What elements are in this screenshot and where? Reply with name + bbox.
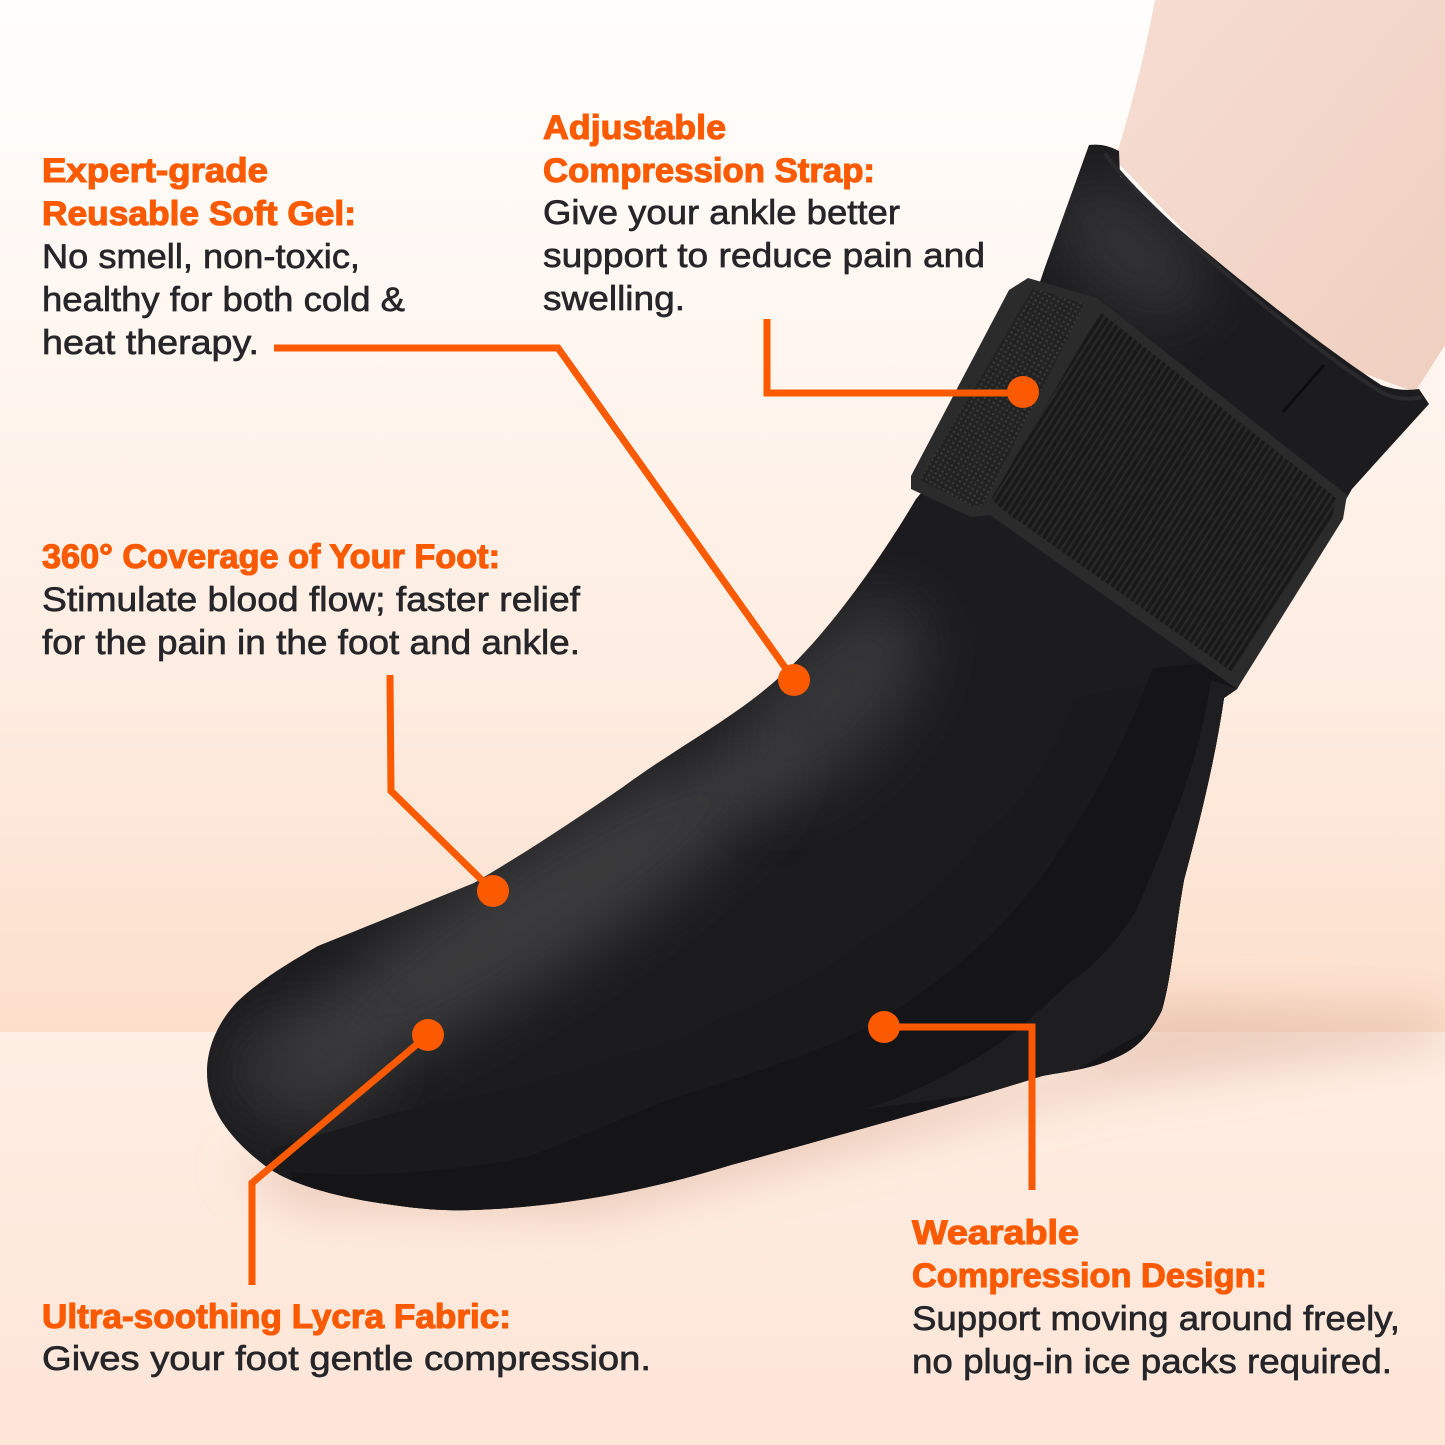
dot — [477, 875, 509, 907]
dot — [412, 1019, 444, 1051]
sole band — [278, 688, 1238, 1210]
text: Expert-grade Reusable Soft Gel: Expert-grade — [42, 152, 268, 190]
text: 360 Coverage: for the pain in the foot and ankle. — [42, 624, 580, 662]
sock body — [207, 145, 1429, 1210]
text: Expert-grade Reusable Soft Gel: healthy for both cold & — [42, 281, 405, 319]
text: Adjustable Compression Strap: swelling. — [543, 280, 685, 318]
heel panel — [866, 680, 1240, 1109]
text: Wearable Compression Design: Compression Design: — [912, 1257, 1267, 1295]
text: 360 Coverage — [42, 538, 581, 662]
text: Adjustable Compression Strap — [543, 109, 985, 318]
text: 360 Coverage: 360° Coverage of Your Foot: — [42, 538, 500, 576]
velcro strap — [911, 278, 1347, 689]
text: Expert-grade Reusable Soft Gel: Reusable Soft Gel: — [42, 195, 356, 233]
text: Expert-grade Reusable Soft Gel: heat therapy. — [42, 324, 259, 362]
text: Ultra-soothing Lycra Fabric: Ultra-soothing Lycra Fabric: — [42, 1298, 511, 1336]
dot — [1007, 376, 1039, 408]
text: Adjustable Compression Strap: Give your ankle better — [543, 194, 900, 232]
text: 360 Coverage: Stimulate blood flow; faster relief — [42, 581, 581, 619]
shading and panels — [220, 154, 1240, 1240]
dot — [868, 1011, 900, 1043]
seam and sole — [292, 688, 1238, 1210]
callout line: coverage — [390, 675, 509, 907]
text: Wearable Compression Design — [912, 1214, 1400, 1381]
callout line: fabric — [252, 1019, 444, 1285]
text: Expert-grade Reusable Soft Gel — [42, 152, 405, 362]
callout line: design — [868, 1011, 1032, 1190]
product: ice sock — [207, 145, 1429, 1240]
callout line: strap — [767, 319, 1039, 408]
floor shadow — [230, 1000, 1445, 1215]
text: Ultra-soothing Lycra Fabric — [42, 1298, 651, 1378]
text: Adjustable Compression Strap: Adjustable — [543, 109, 726, 147]
text: Wearable Compression Design: no plug-in ice packs required. — [912, 1343, 1392, 1381]
callout line: gel — [274, 348, 810, 696]
text: Adjustable Compression Strap: Compression Strap: — [543, 152, 875, 190]
text: Wearable Compression Design: Support moving around freely, — [912, 1300, 1400, 1338]
dot — [778, 664, 810, 696]
text: Adjustable Compression Strap: support to reduce pain and — [543, 237, 985, 275]
leg — [1115, 0, 1445, 392]
strap texture — [992, 312, 1336, 672]
text: Ultra-soothing Lycra Fabric: Gives your foot gentle compression. — [42, 1340, 651, 1378]
collar lip — [1105, 153, 1422, 399]
text: Wearable Compression Design: Wearable — [912, 1214, 1079, 1252]
strap tab — [920, 288, 1085, 506]
text: Expert-grade Reusable Soft Gel: No smell, non-toxic, — [42, 238, 360, 276]
collar fold line — [1283, 365, 1324, 412]
